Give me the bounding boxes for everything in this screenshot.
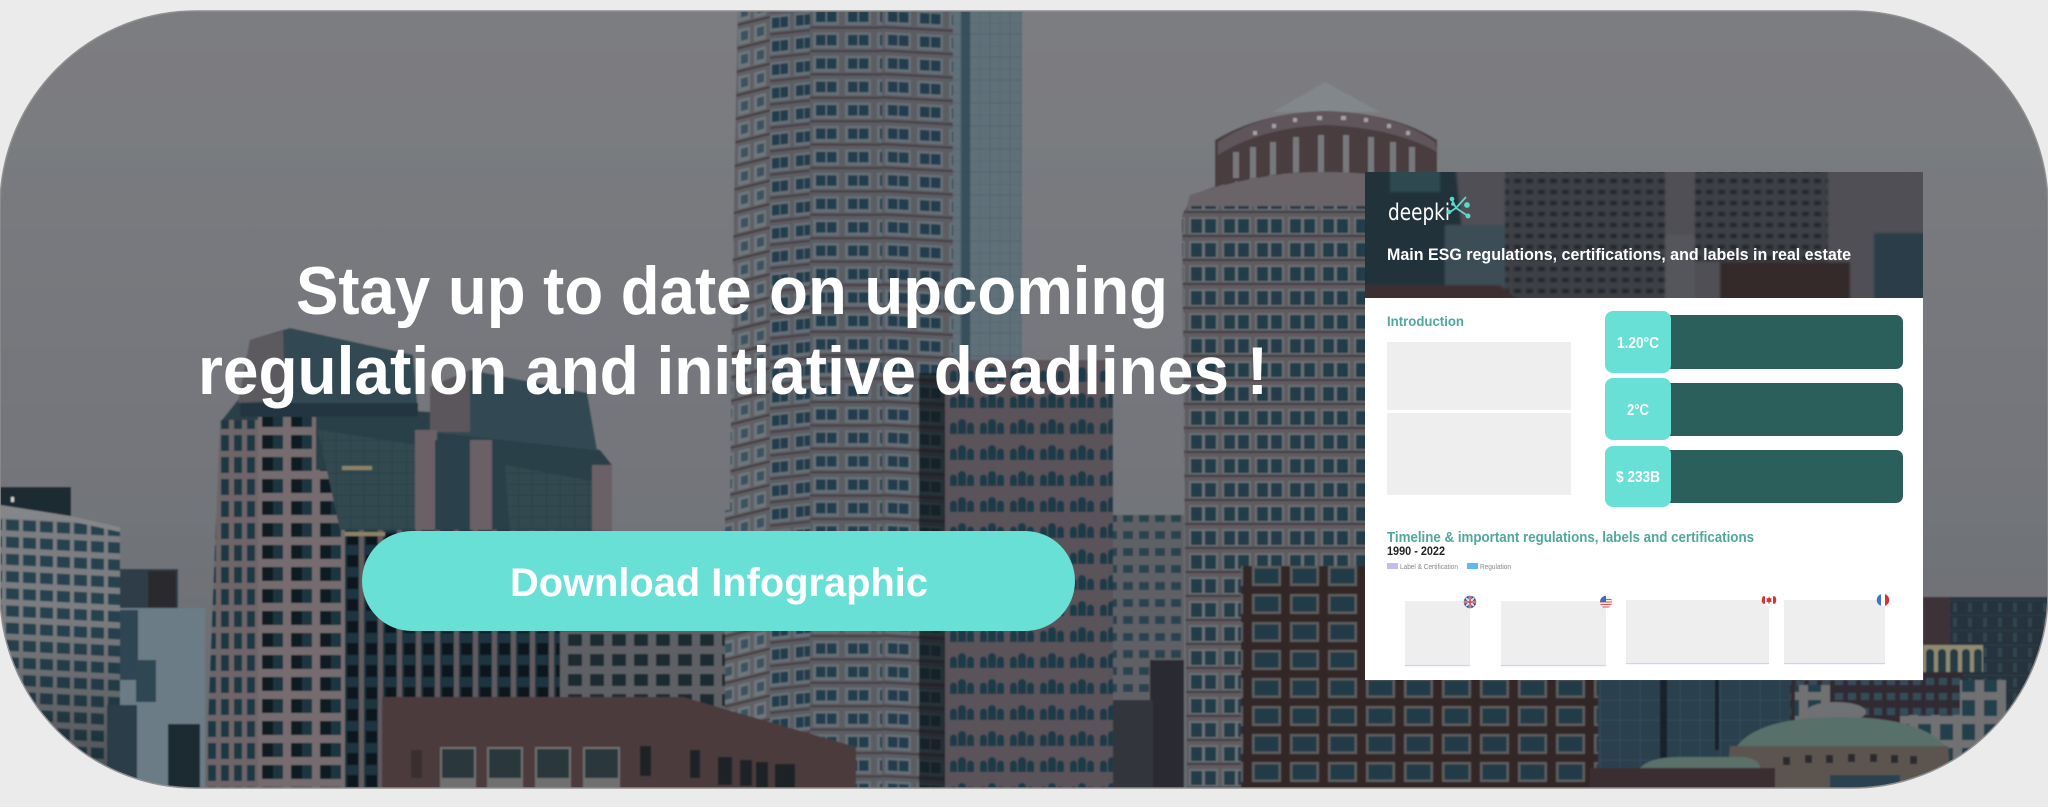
stat: 2°C	[1605, 378, 1903, 440]
legend	[1387, 563, 1511, 571]
country box: France	[1784, 594, 1889, 664]
building: glass strip	[953, 0, 1022, 361]
headline	[198, 253, 1268, 409]
icon: Canada flag	[1762, 594, 1776, 606]
building: central round tower	[725, 0, 953, 798]
country box: Canada	[1626, 594, 1776, 664]
button: download infographic: Download Infographic	[510, 561, 928, 605]
icon: network star	[1448, 197, 1470, 218]
country box: UK	[1405, 596, 1476, 666]
building: arched-window block	[945, 360, 1113, 798]
icon: France flag	[1877, 594, 1889, 606]
stat: $ 233B	[1605, 446, 1903, 507]
section heading: timeline: Timeline & important regulations, labels and certifications	[1387, 530, 1754, 546]
stat: $ 233B: $ 233B	[1616, 469, 1660, 486]
building: low brick block	[382, 697, 856, 798]
logo: deepki: deepki	[1388, 200, 1450, 226]
intro text placeholder 1	[1387, 342, 1571, 410]
building: low block behind, under button	[560, 631, 726, 709]
building: right-side stepped towers	[1790, 596, 2048, 762]
card: white sheet	[1365, 172, 1923, 680]
button: download infographic	[362, 531, 1075, 631]
country box: USA	[1501, 596, 1612, 666]
timeline date range: 1990 - 2022	[1387, 546, 1445, 558]
legend: Regulation	[1480, 564, 1511, 571]
stat: 1.20°C	[1605, 311, 1903, 373]
building: small block by right tower	[1113, 515, 1184, 798]
headline: Stay up to date on upcoming	[296, 253, 1168, 329]
section heading: introduction: Introduction	[1387, 313, 1464, 329]
stat: 2°C: 2°C	[1627, 402, 1649, 419]
building: far left round tower	[0, 487, 205, 798]
stat: 1.20°C: 1.20°C	[1617, 335, 1659, 352]
icon: UK flag	[1464, 596, 1476, 608]
legend: Label & Certification	[1400, 564, 1458, 571]
building: blue glass block	[1597, 680, 1803, 769]
building: domed rotunda	[1590, 701, 1950, 788]
card title: Main ESG regulations, certifications, and labels in real estate	[1387, 246, 1851, 264]
intro text placeholder 2	[1387, 413, 1571, 495]
headline: regulation and initiative deadlines !	[198, 333, 1268, 409]
icon: US flag	[1600, 596, 1612, 608]
card header photo	[1365, 172, 1923, 298]
building: large glass-roofed tower	[205, 328, 612, 798]
infographic preview card	[1350, 160, 1940, 680]
building: lower brick block with windows	[1241, 566, 1601, 798]
building: right round tower with crown	[1182, 82, 1445, 798]
